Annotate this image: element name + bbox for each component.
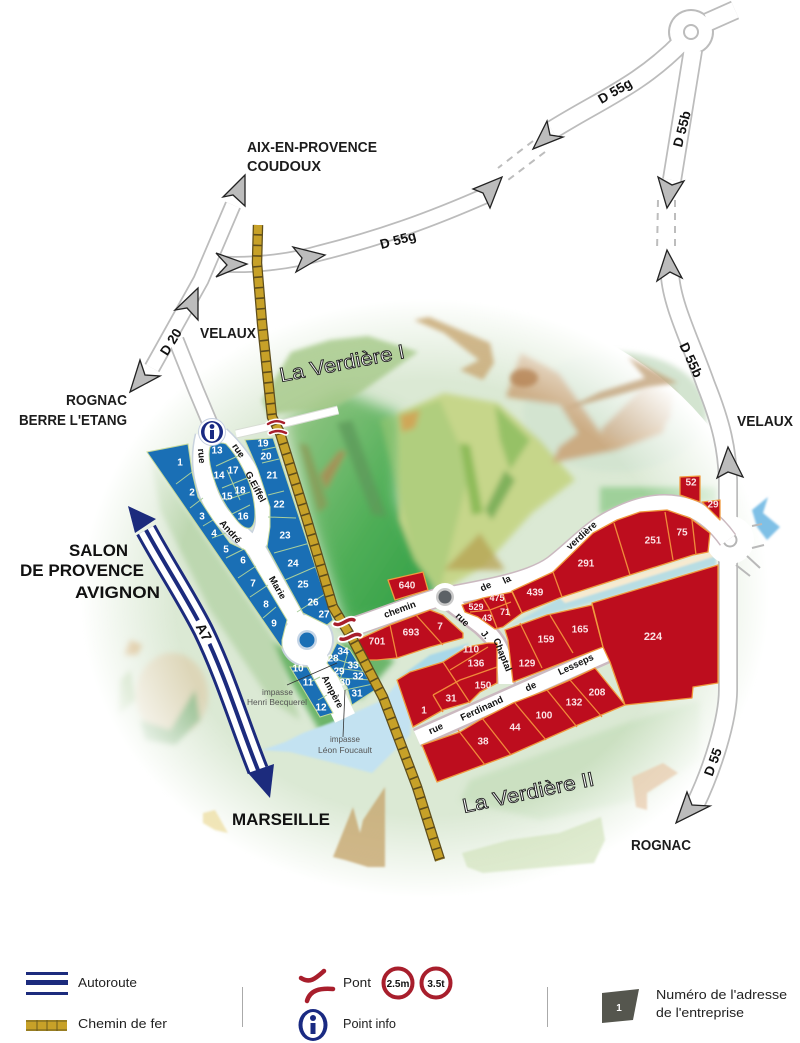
destination labels: DE PROVENCE [20, 561, 144, 580]
legend: point info [298, 1009, 396, 1041]
blue lot numbers: 5 [223, 544, 229, 556]
blue lot numbers: 24 [287, 558, 299, 570]
red lot numbers: 150 [475, 680, 492, 692]
red lot numbers [369, 478, 719, 748]
legend: height limit sign [384, 968, 412, 998]
legend: lot number [602, 987, 787, 1023]
legend: chemin de fer: Chemin de fer [78, 1016, 168, 1031]
blue lot numbers: 2 [189, 488, 195, 498]
red lot numbers: 439 [527, 588, 544, 598]
icon: bridge south [335, 619, 360, 639]
blue lot numbers: 14 [213, 470, 225, 482]
street labels [195, 442, 599, 737]
callout: impasse Henri Becquerel: impasse [262, 687, 293, 697]
icon: info point on map [198, 418, 226, 446]
street labels: André [217, 518, 243, 546]
blue lot numbers: 11 [303, 678, 314, 688]
blue lot numbers: 15 [221, 492, 233, 502]
street labels: rue [195, 448, 207, 464]
red lot numbers: 208 [589, 688, 606, 698]
callout: impasse Léon Foucault: Léon Foucault [318, 745, 373, 755]
legend: lot number: de l'entreprise [656, 1005, 744, 1020]
roundabout east [706, 516, 764, 576]
blue lots shapes [147, 438, 375, 717]
road labels: D 55g [378, 228, 418, 252]
destination labels: VELAUX [200, 326, 256, 342]
blue lot numbers: 19 [257, 438, 269, 450]
blue lot numbers: 30 [339, 678, 351, 688]
destination labels: COUDOUX [247, 159, 321, 175]
destination labels: ROGNAC [631, 838, 691, 854]
blue lot numbers: 18 [234, 486, 246, 496]
arrow head north [128, 506, 156, 533]
blue lot numbers: 7 [250, 578, 256, 590]
red lot numbers: 132 [566, 698, 583, 708]
A7 road label [191, 617, 217, 647]
callout: impasse Léon Foucault [318, 690, 373, 755]
blue lot numbers: 4 [211, 528, 217, 540]
red lot numbers: 52 [685, 478, 697, 488]
blue lot numbers: 21 [266, 470, 278, 482]
legend: pont [301, 971, 371, 1001]
legend: autoroute [26, 972, 137, 995]
street labels: de [479, 580, 493, 594]
street labels: Ferdinand [459, 694, 505, 724]
blue lot numbers: 31 [351, 688, 363, 700]
legend: weight limit sign [422, 968, 450, 998]
destination labels: BERRE L'ETANG [19, 413, 127, 429]
red lot numbers: 1 [421, 706, 427, 716]
water: lake and ponds [262, 497, 780, 773]
zone title: La Verdière I: La Verdière I [278, 341, 407, 387]
highway A7 [128, 506, 274, 798]
blue lot numbers: 33 [347, 660, 359, 672]
destination labels: MARSEILLE [232, 810, 330, 829]
street labels: rue [229, 442, 247, 460]
blue lot numbers: 20 [260, 452, 272, 462]
destination labels: AVIGNON [75, 583, 160, 602]
panel: blue lots La Verdière I [147, 438, 375, 717]
blue lot numbers: 25 [297, 580, 309, 590]
blue lot numbers: 6 [240, 556, 246, 566]
callout: impasse Henri Becquerel: Henri Becquerel [247, 697, 307, 707]
legend: point info: Point info [343, 1016, 396, 1031]
red lot numbers: 71 [500, 607, 510, 617]
red lot numbers: 251 [645, 536, 662, 546]
red lot numbers: 44 [509, 722, 521, 734]
red lot numbers: 29 [707, 500, 719, 510]
red lot numbers: 100 [536, 710, 553, 722]
destination labels: SALON [69, 541, 128, 560]
legend: lot number: Numéro de l'adresse [656, 987, 787, 1002]
red lot numbers: 640 [399, 580, 416, 592]
road labels: D 55b [676, 340, 706, 380]
A7 road label: A7 [193, 620, 215, 644]
street labels: rue [453, 611, 471, 629]
destination labels: VELAUX [737, 414, 793, 430]
blue lot numbers: 26 [307, 598, 319, 608]
roundabout centres [297, 588, 454, 650]
legend: chemin de fer [26, 1016, 168, 1031]
legend: weight limit sign: 3.5t [427, 979, 445, 990]
street labels: chemin [382, 599, 418, 621]
blue lot numbers: 28 [327, 654, 339, 664]
red lot numbers: 75 [676, 528, 688, 538]
red lot numbers: 291 [578, 558, 595, 570]
street labels: rue [427, 721, 445, 737]
road labels: D 55 [701, 746, 725, 778]
street labels: J. [478, 628, 492, 642]
red lot numbers: 224 [644, 631, 663, 643]
callout: impasse Léon Foucault: impasse [330, 734, 360, 744]
zone title: La Verdière II: La Verdière II [460, 769, 596, 818]
destination labels [19, 140, 793, 854]
direction arrows [130, 121, 743, 823]
blue lot numbers: 16 [237, 512, 249, 522]
blue lot numbers [177, 438, 364, 714]
icon: bridge north [268, 421, 286, 433]
legend: height limit sign: 2.5m [387, 979, 410, 990]
destination labels: AIX-EN-PROVENCE [247, 140, 377, 156]
red lot numbers: 693 [403, 628, 420, 638]
road labels: D 20 [157, 326, 185, 358]
blue lot numbers: 13 [211, 446, 223, 456]
blue lot numbers: 3 [199, 512, 205, 522]
blue lot numbers: 34 [337, 646, 349, 658]
blue lot numbers: 22 [273, 500, 285, 510]
red lot numbers: 129 [519, 658, 536, 670]
red lots shapes [357, 476, 720, 782]
blue lot numbers: 10 [292, 664, 304, 674]
street labels: de [524, 680, 538, 694]
road labels: D 55b [670, 109, 694, 149]
road labels: D 55g [595, 75, 635, 107]
blue lot numbers: 17 [227, 466, 239, 476]
street labels: Lesseps [556, 652, 596, 678]
road labels [157, 75, 725, 778]
callout: impasse Henri Becquerel [247, 663, 337, 707]
street labels: Chaptal [490, 637, 514, 673]
red lot numbers: 31 [445, 694, 457, 704]
road network outside the zones [152, 9, 735, 805]
destination labels: ROGNAC [66, 393, 127, 409]
blue lot numbers: 29 [333, 666, 345, 678]
legend: pont: Pont [343, 975, 371, 990]
red lot numbers: 110 [463, 644, 480, 656]
blue lot numbers: 12 [315, 702, 327, 714]
red lot numbers: 136 [468, 658, 485, 670]
legend: lot number: 1 [616, 1003, 622, 1014]
red lot numbers: 38 [477, 736, 489, 748]
blue lot numbers: 27 [318, 610, 330, 620]
map background terrain [79, 297, 771, 899]
internal roads of the zones [202, 410, 728, 738]
panel: red lots La Verdière II [357, 476, 720, 782]
blue lot numbers: 9 [271, 618, 277, 630]
legend: autoroute: Autoroute [78, 975, 137, 990]
red lot numbers: 165 [572, 624, 589, 636]
blue lot numbers: 8 [263, 600, 269, 610]
street labels: Marie [266, 574, 288, 602]
red lot numbers: 529 [468, 602, 484, 612]
red lot numbers: 7 [437, 622, 443, 632]
red lot numbers: 43 [482, 613, 492, 623]
red lot numbers: 701 [369, 636, 386, 648]
street labels: G.Eiffel [242, 470, 268, 504]
blue lot numbers: 1 [177, 458, 183, 468]
red lot numbers: 475 [489, 593, 505, 603]
arrow head south [248, 764, 274, 798]
panel: legend [26, 968, 787, 1041]
blue lot numbers: 23 [279, 530, 291, 542]
street labels: Ampère [319, 674, 345, 710]
red lot numbers: 159 [538, 634, 555, 646]
railway line [257, 225, 440, 860]
blue lot numbers: 32 [352, 672, 364, 682]
street labels: la [501, 573, 514, 587]
street labels: verdière [565, 520, 599, 552]
